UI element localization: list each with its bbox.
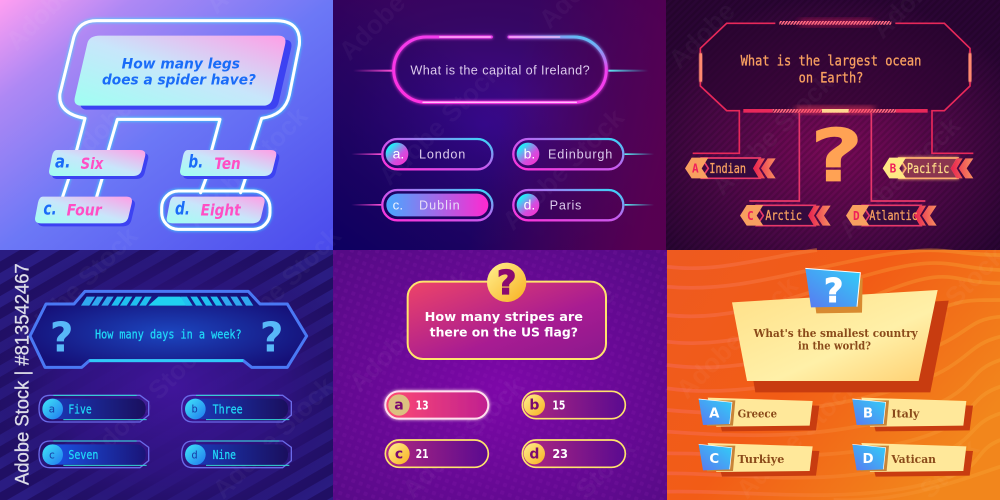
answer b: Ten — [214, 154, 241, 173]
icon: right question mark: ? — [260, 314, 283, 362]
answer d: Nine — [213, 447, 236, 462]
answer B highlighted: B — [890, 161, 897, 176]
answer D — [846, 205, 937, 226]
answer b: Three — [213, 401, 243, 416]
question card: What's the smallest country — [753, 326, 918, 340]
answer a: Six — [81, 154, 104, 173]
answer c: c — [395, 446, 403, 462]
question card: there on the US flag? — [430, 324, 578, 339]
answer C — [740, 205, 831, 226]
panel: capital of Ireland question: Adobe Stock — [496, 102, 630, 236]
question card: How many stripes are — [425, 309, 583, 324]
answer b: b — [191, 403, 198, 416]
answer D: Atlantic — [869, 208, 918, 224]
icon: question tag: ? — [824, 271, 843, 310]
answer c highlighted: c — [49, 448, 55, 461]
neon connector frame — [60, 21, 300, 229]
answer b: Edinburgh — [548, 148, 612, 162]
answer b: 15 — [552, 398, 565, 412]
panel: smallest country question — [667, 240, 1000, 500]
question capsule: What is the capital of Ireland? — [410, 64, 590, 78]
answer b — [513, 139, 654, 169]
panel: days in a week question: Adobe Stock — [10, 220, 144, 354]
icon: question tag — [805, 268, 863, 313]
panel: largest ocean question — [662, 0, 1000, 250]
answer A: Greece — [738, 407, 777, 421]
answer b — [180, 150, 279, 179]
answer a highlighted: 13 — [416, 398, 429, 412]
answer b — [182, 395, 291, 422]
answer c highlighted: Dublin — [419, 198, 460, 212]
panel: spider legs question: Adobe Stock — [60, 37, 194, 171]
question card — [408, 282, 606, 359]
answer a: London — [419, 148, 465, 162]
answer d: Paris — [550, 198, 581, 212]
answer D: D — [853, 208, 860, 223]
answer d highlighted: d. — [175, 199, 190, 220]
answer b: b — [529, 398, 539, 414]
answer A: A — [692, 161, 699, 176]
answer b — [522, 391, 625, 419]
question frame — [693, 20, 973, 201]
panel: smallest country question: Adobe Stock — [670, 270, 804, 404]
answer B highlighted: Pacific — [907, 161, 949, 177]
panel: days in a week question — [0, 220, 347, 500]
question text: What is the largest ocean — [741, 53, 921, 69]
panel: days in a week question: Adobe Stock — [80, 334, 214, 468]
answer d highlighted: Eight — [201, 200, 242, 219]
question card — [732, 290, 949, 392]
answer C: Arctic — [765, 208, 802, 224]
answer B — [852, 398, 973, 431]
panel: capital of Ireland question: Adobe Stock — [373, 57, 507, 191]
answer c: 21 — [416, 447, 429, 461]
question text: How many days in a week? — [95, 326, 242, 341]
answer a: a. — [393, 145, 404, 161]
answer a highlighted — [385, 391, 488, 419]
panel: days in a week question: Adobe Stock — [213, 220, 347, 354]
answer a: Five — [68, 401, 92, 416]
answer D — [852, 443, 973, 477]
question card — [75, 36, 291, 110]
panel: spider legs question: Adobe Stock — [180, 100, 314, 234]
vertical stock credit: Adobe Stock | #813542467 — [13, 263, 34, 485]
answer A — [685, 158, 776, 178]
answer A: A — [709, 407, 720, 422]
answer D: D — [862, 452, 874, 467]
answer c highlighted: Seven — [68, 447, 98, 462]
answer a — [49, 150, 148, 179]
answer d: d — [191, 448, 198, 461]
answer c: Four — [67, 200, 102, 219]
question frame — [30, 291, 307, 367]
answer a: a. — [55, 152, 71, 173]
icon: left question mark: ? — [50, 314, 73, 362]
panel: largest ocean question: Adobe Stock — [706, 67, 840, 201]
answer a — [351, 139, 492, 169]
answer B: Italy — [891, 407, 920, 421]
answer d — [522, 440, 625, 467]
icon: question mark: ? — [806, 115, 864, 198]
answer C: Turkiye — [738, 452, 784, 466]
answer A: Indian — [709, 161, 746, 177]
panel: US flag stripes question — [333, 250, 667, 500]
answer c highlighted — [39, 441, 149, 468]
panel: largest ocean question: Adobe Stock — [832, 110, 966, 244]
answer d: d — [529, 446, 539, 462]
panel: US flag stripes question: Adobe — [543, 279, 621, 358]
answer b: b. — [188, 152, 203, 173]
answer c — [35, 197, 135, 226]
answer d highlighted — [167, 197, 265, 223]
panel: capital of Ireland question — [333, 0, 667, 250]
answer a — [39, 395, 149, 422]
question card: How many legs — [122, 57, 240, 73]
question card: in the world? — [798, 338, 871, 352]
icon: question badge: ? — [497, 263, 516, 302]
answer d — [513, 190, 654, 220]
answer b: b. — [524, 145, 535, 161]
answer D: Vatican — [890, 452, 936, 466]
panel: spider legs question — [0, 0, 334, 250]
question card: does a spider have? — [102, 73, 256, 89]
answer d — [182, 441, 291, 468]
panel: US flag stripes question: Adobe Stock — [343, 264, 477, 398]
answer C — [699, 443, 819, 477]
answer a: a — [49, 403, 55, 416]
icon: question badge — [487, 263, 526, 302]
answer d: 23 — [552, 447, 568, 461]
answer C: C — [747, 208, 754, 223]
answer C: C — [709, 452, 719, 467]
answer A — [699, 398, 819, 431]
answer c — [385, 440, 488, 467]
answer c: c. — [43, 199, 57, 220]
answer a highlighted: a — [394, 398, 404, 414]
answer d: d. — [524, 196, 535, 212]
answer B highlighted — [883, 158, 973, 178]
answer c highlighted — [351, 190, 492, 220]
question text line 2: on Earth? — [799, 71, 863, 87]
question capsule — [353, 37, 648, 102]
answer c highlighted: c. — [393, 197, 403, 212]
answer B: B — [863, 407, 873, 422]
